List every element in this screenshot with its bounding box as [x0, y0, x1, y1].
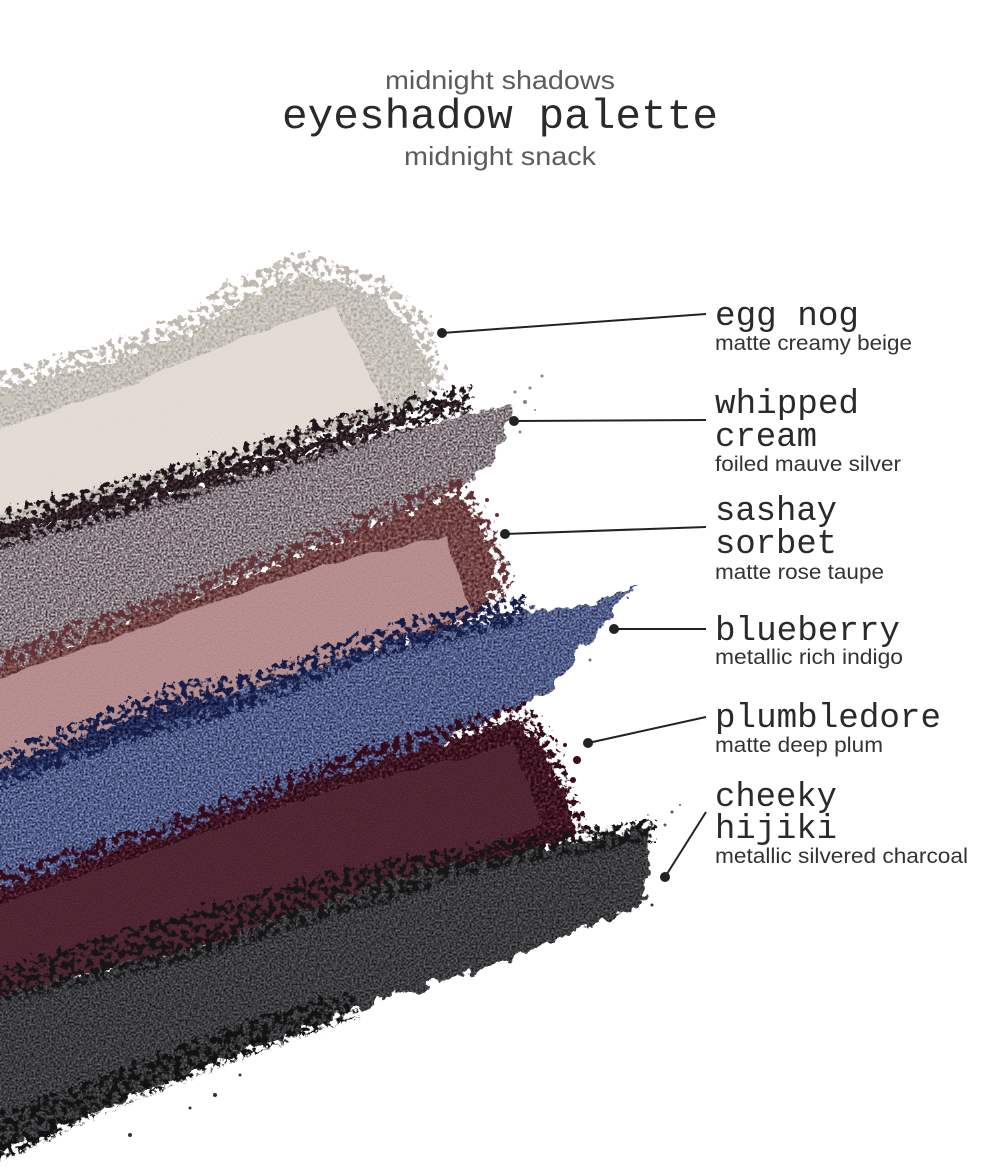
swatch: whipped cream	[0, 385, 512, 680]
label: sashay sorbet	[715, 493, 884, 584]
label: whipped cream: whipped	[715, 386, 859, 424]
swatch: cheeky hijiki	[0, 820, 655, 1168]
label: egg nog: matte creamy beige	[715, 332, 912, 355]
leader line: sashay sorbet	[500, 527, 706, 539]
leader line: egg nog	[437, 314, 706, 338]
collection name: midnight shadows	[385, 65, 615, 95]
label: blueberry	[715, 613, 903, 669]
label: cheeky hijiki: cheeky	[715, 779, 837, 817]
label: plumbledore: matte deep plum	[715, 734, 883, 757]
label: whipped cream: foiled mauve silver	[715, 453, 901, 476]
label: cheeky hijiki	[715, 779, 968, 868]
shade name: midnight snack	[404, 141, 597, 171]
loose powder crumbs	[2, 253, 681, 1137]
swatch: blueberry	[0, 586, 638, 905]
leader line: blueberry	[609, 624, 706, 634]
swatch: egg nog	[0, 254, 446, 530]
label: blueberry: blueberry	[715, 613, 900, 651]
label: egg nog: egg nog	[715, 298, 859, 336]
label: plumbledore: plumbledore	[715, 700, 941, 738]
swatch: plumbledore	[0, 704, 590, 1005]
label: sashay sorbet: sashay	[715, 493, 837, 531]
label: cheeky hijiki: metallic silvered charcoal	[715, 845, 968, 868]
label: plumbledore	[715, 700, 941, 757]
label: sashay sorbet: matte rose taupe	[715, 561, 884, 584]
leader line: whipped cream	[509, 416, 706, 426]
leader line: plumbledore	[583, 717, 706, 748]
label: whipped cream	[715, 386, 901, 476]
label: cheeky hijiki: hijiki	[715, 811, 837, 849]
label: egg nog	[715, 298, 912, 355]
leader line: cheeky hijiki	[660, 812, 706, 882]
product title: eyeshadow palette	[282, 93, 718, 141]
label: blueberry: metallic rich indigo	[715, 646, 903, 669]
title block	[282, 65, 718, 171]
label: whipped cream: cream	[715, 419, 817, 457]
label: sashay sorbet: sorbet	[715, 526, 837, 564]
swatch: sashay sorbet	[0, 476, 512, 790]
